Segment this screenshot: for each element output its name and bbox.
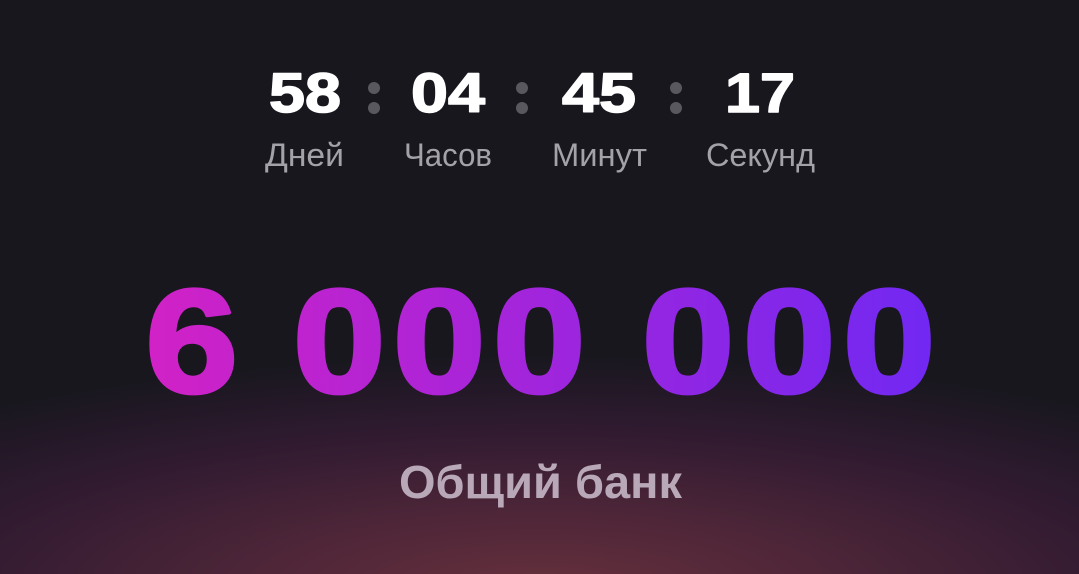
minutes label: Минут [552, 137, 647, 173]
separator 2 [516, 82, 528, 114]
days value: 58 [269, 61, 341, 124]
prize label: Общий банк [399, 456, 683, 508]
days label: Дней [265, 137, 344, 173]
seconds label: Секунд [706, 137, 815, 173]
seconds value: 17 [725, 61, 795, 124]
prize amount: 6 000 000 [146, 260, 935, 424]
separator 1 [368, 82, 380, 114]
minutes value: 45 [562, 61, 636, 124]
countdown timer [265, 61, 815, 173]
hours label: Часов [404, 137, 492, 173]
separator 3 [670, 82, 682, 114]
hours value: 04 [411, 61, 485, 124]
